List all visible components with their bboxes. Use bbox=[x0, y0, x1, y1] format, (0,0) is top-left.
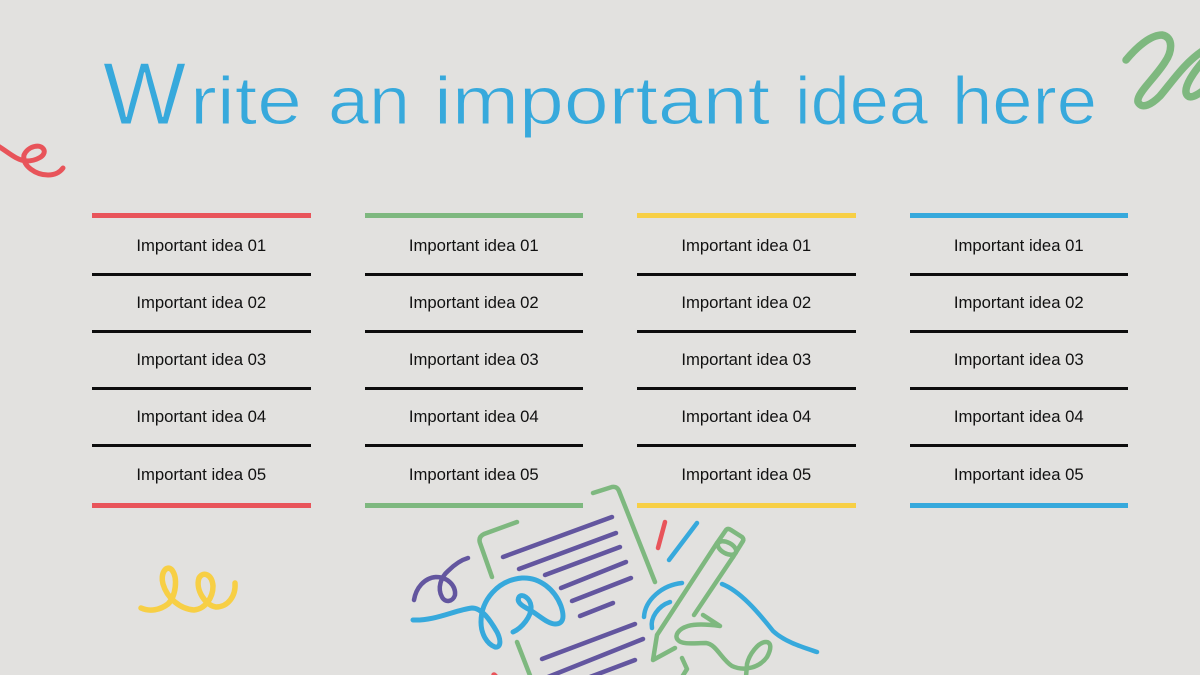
icon: yellow curl bbox=[141, 568, 235, 610]
marks bbox=[658, 522, 665, 548]
panel: green list: Important idea 01 bbox=[409, 236, 539, 255]
panel: blue list: Important idea 04 bbox=[954, 407, 1084, 426]
paper outline bbox=[480, 487, 655, 675]
panel: blue list: Important idea 01 bbox=[954, 236, 1084, 255]
panel: yellow list: Important idea 01 bbox=[681, 236, 811, 255]
title: an bbox=[328, 63, 410, 139]
title bbox=[103, 44, 1097, 143]
icon: document and hand illustration bbox=[413, 487, 817, 675]
panel: yellow list: Important idea 03 bbox=[681, 350, 811, 369]
panel: yellow list: Important idea 04 bbox=[681, 407, 811, 426]
panel: blue list: Important idea 02 bbox=[954, 293, 1084, 312]
panel: green list: Important idea 02 bbox=[409, 293, 539, 312]
title: important bbox=[434, 63, 770, 139]
panel: red list: Important idea 01 bbox=[136, 236, 266, 255]
title: here bbox=[952, 63, 1097, 139]
panel: blue list bbox=[910, 213, 1128, 508]
panel: blue list: Important idea 03 bbox=[954, 350, 1084, 369]
panel: green list: Important idea 03 bbox=[409, 350, 539, 369]
panel: green list: Important idea 04 bbox=[409, 407, 539, 426]
title: W bbox=[103, 44, 186, 143]
icon: red curl bbox=[0, 146, 63, 175]
panel: yellow list: Important idea 02 bbox=[681, 293, 811, 312]
pencil bbox=[653, 529, 770, 675]
title: rite bbox=[190, 63, 302, 139]
panel: red list: Important idea 05 bbox=[136, 465, 266, 484]
panel: green list bbox=[365, 213, 583, 508]
panel: red list bbox=[92, 213, 311, 508]
panel: yellow list: Important idea 05 bbox=[681, 465, 811, 484]
panel: red list: Important idea 02 bbox=[136, 293, 266, 312]
text lines bbox=[503, 517, 643, 675]
panel: red list: Important idea 04 bbox=[136, 407, 266, 426]
panel: blue list: Important idea 05 bbox=[954, 465, 1084, 484]
panel: yellow list bbox=[637, 213, 856, 508]
purple signature curl bbox=[414, 558, 468, 601]
icon: green scribble bbox=[1126, 35, 1200, 106]
panel: red list: Important idea 03 bbox=[136, 350, 266, 369]
blue signature scribble bbox=[413, 578, 563, 647]
hand outline bbox=[644, 583, 817, 652]
panel: green list: Important idea 05 bbox=[409, 465, 539, 484]
title: idea bbox=[795, 63, 928, 139]
